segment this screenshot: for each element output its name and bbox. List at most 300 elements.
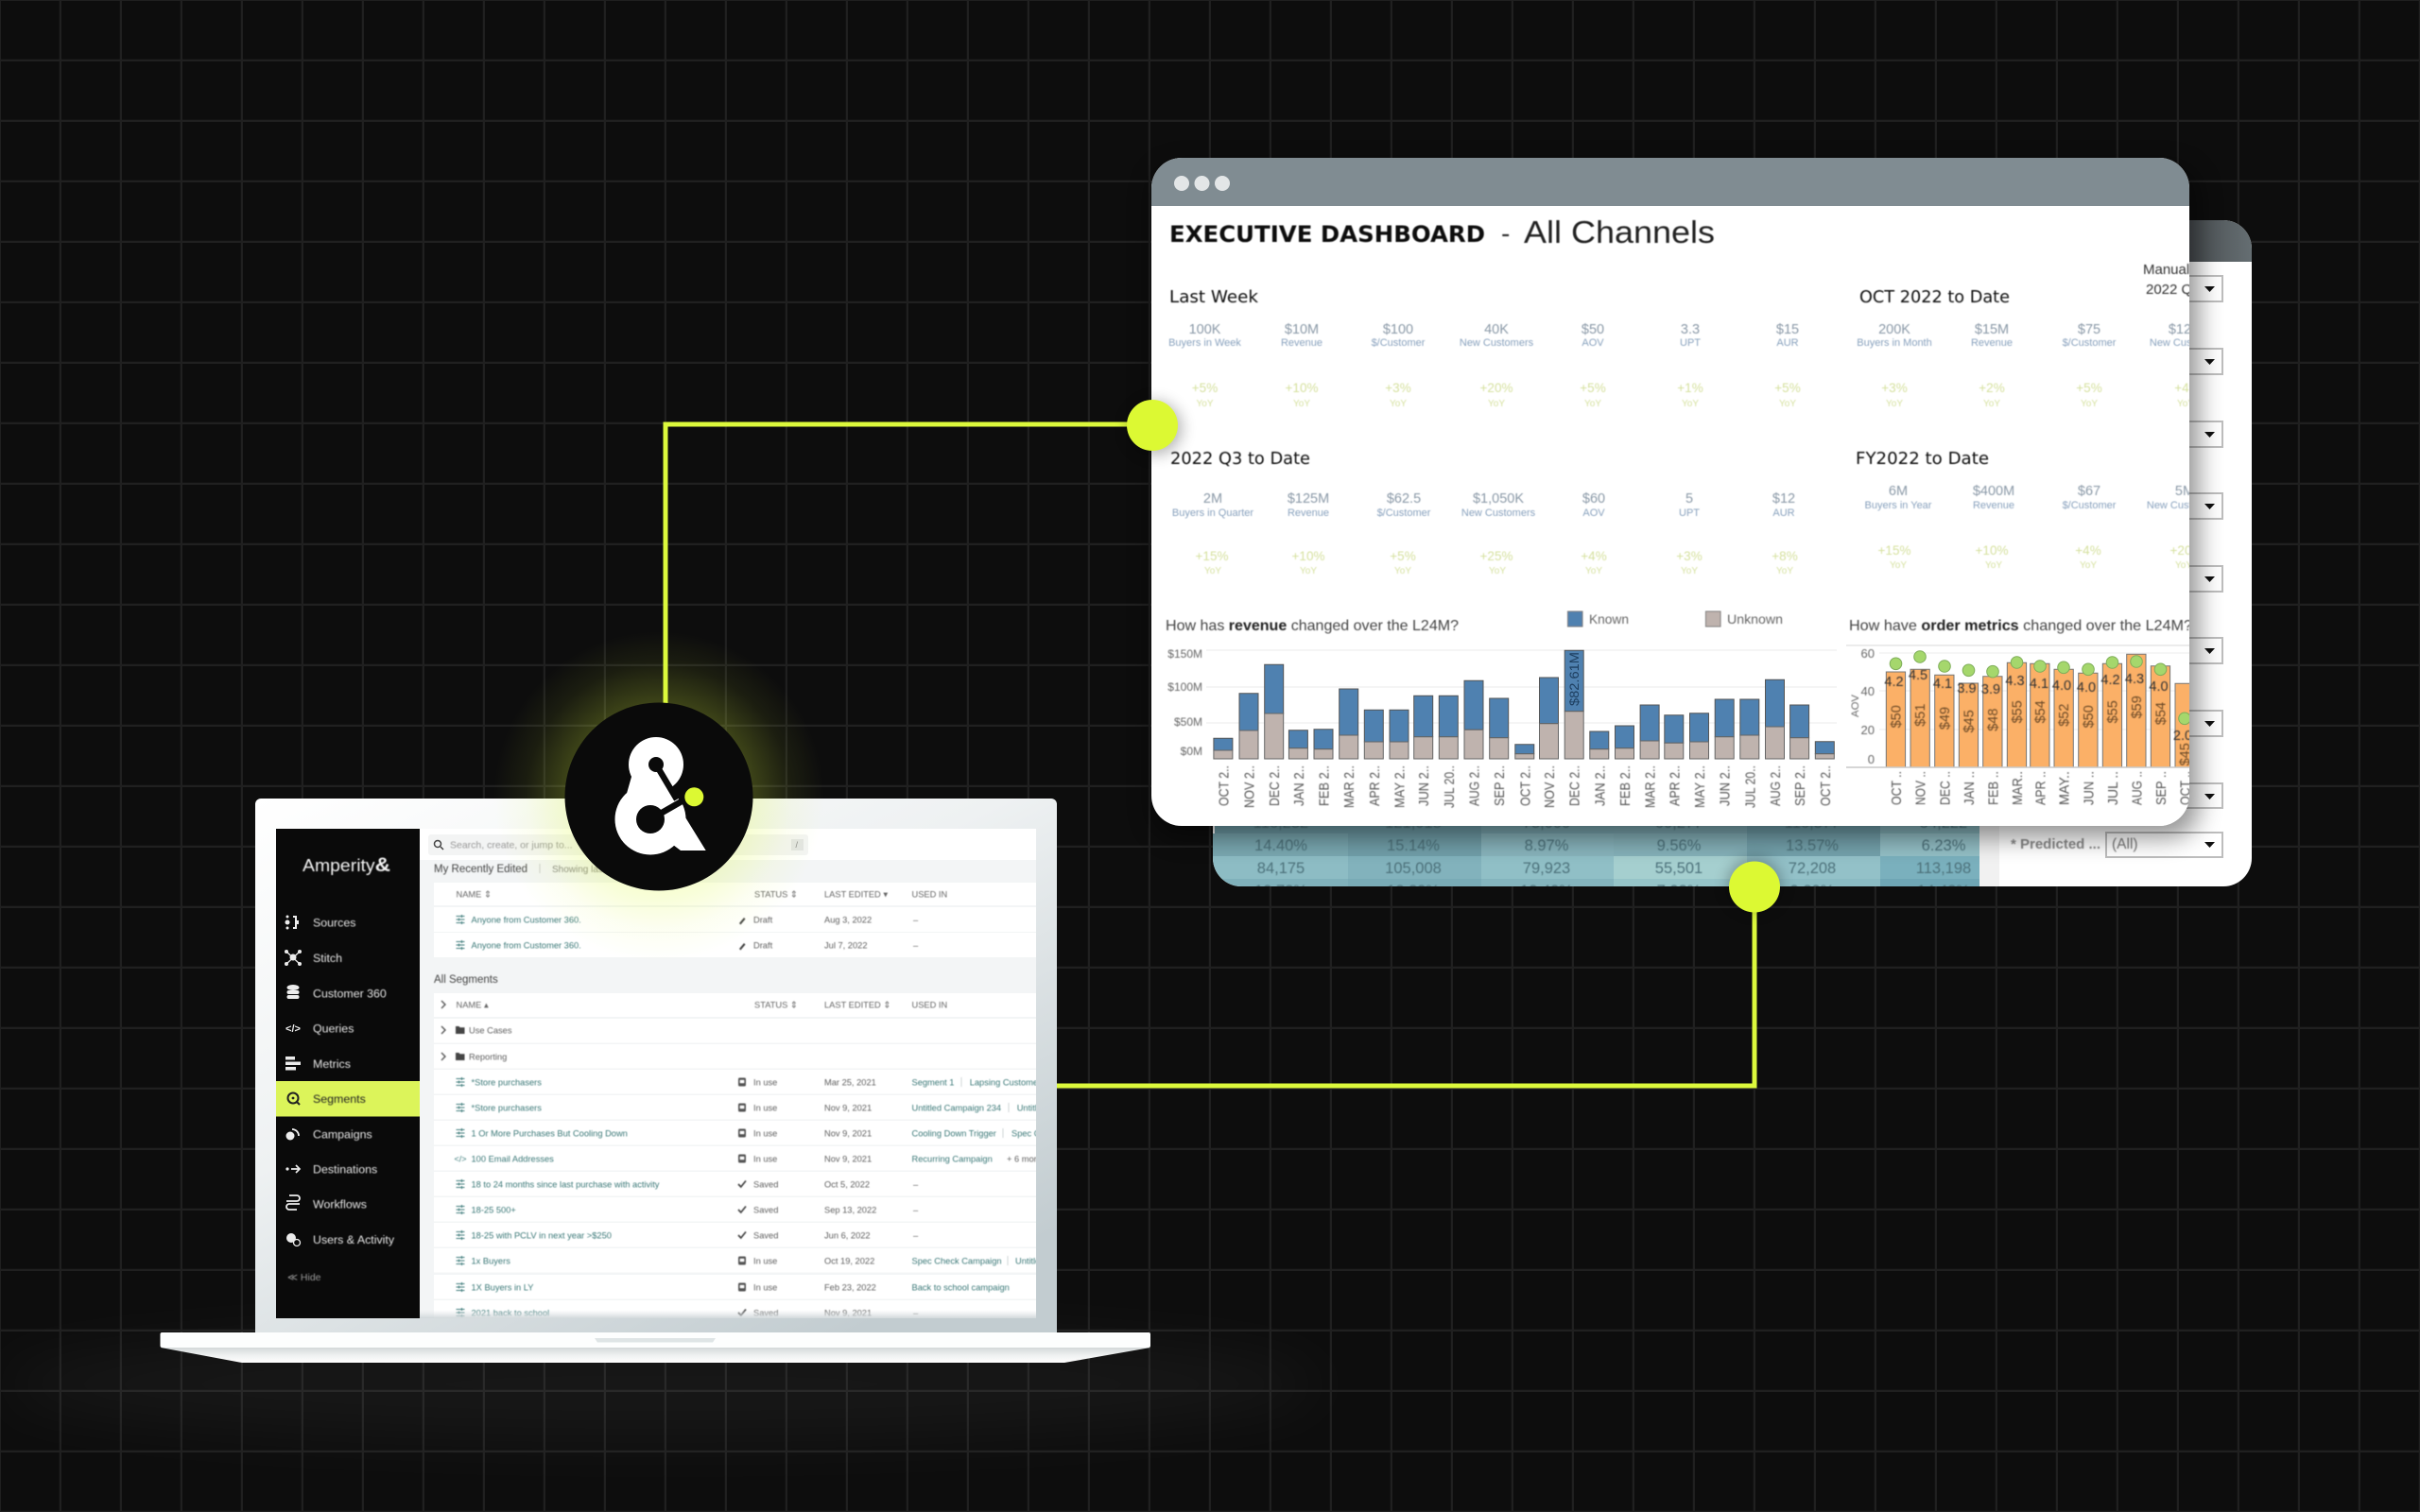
all segments table: Untitled (1015, 1257, 1046, 1266)
KPI block: FY2022 to date: $67 (2078, 484, 2100, 499)
KPI block: last week: YoY (1293, 399, 1310, 409)
AOV axis labels: 20 (1861, 723, 1875, 737)
KPI block: 2022 Q3 to date: UPT (1679, 507, 1700, 519)
heat-map table: 13.57% (1786, 837, 1839, 854)
KPI block: OCT 2022 to date: +2% (1979, 381, 2005, 395)
KPI block: 2022 Q3 to date: New Customers (1461, 507, 1536, 519)
AOV dollar values: $59 (2130, 696, 2145, 718)
revenue month labels: SEP 2.. (1792, 765, 1808, 806)
panel: executive dashboard window (1151, 158, 2224, 826)
recently edited heading (434, 864, 614, 875)
all segments table: Reporting (469, 1053, 507, 1062)
KPI block: last week: YoY (1197, 399, 1214, 409)
revenue month labels: JUL 20.. (1742, 765, 1758, 808)
revenue month labels: NOV 2.. (1542, 765, 1558, 808)
rear side strip (1979, 826, 1999, 886)
KPI block: OCT 2022 to date: YoY (1983, 399, 2000, 409)
all segments table: – (913, 1206, 919, 1215)
revenue month labels: FEB 2.. (1617, 765, 1634, 806)
KPI block: OCT 2022 to date: YoY (2081, 399, 2098, 409)
KPI block: OCT 2022 to date: $/Customer (2063, 337, 2117, 349)
all segments table (434, 993, 1059, 1324)
revenue y axis labels: $100M (1167, 680, 1202, 694)
all segments table: Jun 6, 2022 (824, 1230, 871, 1240)
KPI block: OCT 2022 to date: +4% (2174, 381, 2201, 395)
revenue month labels: FEB 2.. (1316, 765, 1333, 806)
revenue chart (1166, 611, 1837, 808)
all segments table: – (913, 1179, 919, 1189)
search bar (420, 829, 1036, 860)
all segments table: In use (753, 1128, 777, 1138)
all segments table: – (913, 1308, 919, 1317)
KPI block: last week: 3.3 (1681, 322, 1700, 337)
order metrics title: How have order metrics changed over the L24M? (1849, 618, 2192, 634)
all segments table: Cooling Down Trigger (911, 1128, 996, 1138)
KPI block: OCT 2022 to date (1857, 287, 2224, 409)
dashboard title: - (1501, 220, 1510, 249)
order metric month labels (1889, 771, 2193, 805)
all segments table: Nov 9, 2021 (824, 1155, 872, 1164)
nav labels: Destinations (313, 1162, 377, 1176)
revenue month labels: JUL 20.. (1442, 765, 1458, 808)
KPI block: last week: +10% (1286, 381, 1318, 395)
KPI block: 2022 Q3 to date: YoY (1204, 566, 1221, 576)
AOV dollar values (1889, 696, 2193, 765)
KPI block: OCT 2022 to date: $15M (1975, 322, 2009, 337)
KPI block: last week: YoY (1779, 399, 1796, 409)
all segments heading: All Segments (434, 974, 498, 986)
KPI block: 2022 Q3 to date: YoY (1776, 566, 1793, 576)
KPI block: 2022 Q3 to date: Buyers in Quarter (1172, 507, 1253, 519)
KPI block: 2022 Q3 to date: +8% (1772, 549, 1798, 563)
legend: Unknown (1727, 611, 1783, 627)
KPI block: FY2022 to date: New Customers (2147, 500, 2221, 511)
AOV dollar values: $55 (2010, 700, 2025, 723)
all segments table: STATUS ⇕ (754, 1000, 798, 1009)
heat-map table: 9.56% (1657, 837, 1702, 854)
revenue month labels: NOV 2.. (1242, 765, 1257, 808)
UPT values: 3.9 (1957, 681, 1977, 696)
revenue month labels: JUN 2.. (1416, 765, 1432, 806)
heat-map table: 8.97% (1525, 837, 1569, 854)
laptop ground glow (0, 1328, 1323, 1441)
panel: rear dashboard window (1213, 220, 2252, 900)
all segments table: – (913, 1230, 919, 1240)
all segments table: Spec Check (1011, 1128, 1059, 1138)
KPI block: OCT 2022 to date: +5% (2076, 381, 2102, 395)
order metric month labels: NOV .. (1913, 771, 1928, 805)
manual filter note: 2022 Q... (2146, 282, 2204, 298)
nav labels: Segments (313, 1092, 366, 1106)
recently edited table: USED IN (911, 890, 947, 900)
legend (1567, 611, 1783, 627)
laptop (161, 799, 1150, 1363)
heat-map table: 10.72% (1254, 883, 1307, 900)
AOV dollar values: $54 (2033, 700, 2048, 723)
order metric month labels: SEP .. (2153, 771, 2169, 805)
icon: campaigns (285, 1129, 299, 1140)
filter dropdowns (2106, 276, 2222, 857)
KPI block: last week: Last Week (1169, 287, 1259, 307)
all segments table: 1X Buyers in LY (471, 1283, 533, 1293)
order metric month labels: DEC .. (1938, 771, 1953, 805)
nav labels: Metrics (313, 1057, 351, 1071)
order metric month labels: MAY.. (2057, 771, 2072, 805)
KPI block: last week: +5% (1192, 381, 1218, 395)
revenue y axis labels: $150M (1167, 647, 1202, 661)
KPI block: 2022 Q3 to date: +3% (1676, 549, 1703, 563)
UPT values: 4.1 (2030, 677, 2048, 692)
nav labels: Campaigns (313, 1128, 372, 1142)
KPI block: last week: 100K (1189, 322, 1221, 337)
all segments table: In use (753, 1155, 777, 1164)
known revenue bars (1214, 650, 1834, 754)
AOV dollar values: $50 (1889, 705, 1904, 728)
UPT values: 2.0 (2173, 729, 2192, 744)
logo glow (493, 631, 824, 962)
revenue month labels: MAR 2.. (1341, 765, 1357, 808)
revenue month labels: DEC 2.. (1267, 765, 1283, 806)
recently edited table: STATUS ⇕ (754, 890, 798, 900)
nav icons (285, 915, 302, 1246)
all segments table: + 6 more (1007, 1155, 1042, 1164)
heat-map table: 7.02% (1657, 883, 1702, 900)
recently edited table: Jul 7, 2022 (824, 941, 868, 951)
revenue month labels: APR 2.. (1367, 765, 1383, 806)
KPI block: last week: YoY (1390, 399, 1407, 409)
AOV axis labels: 0 (1868, 752, 1875, 766)
icon: stitch (285, 950, 302, 966)
dashboard title (1170, 219, 1715, 244)
KPI block: OCT 2022 to date: OCT 2022 to Date (1859, 287, 2010, 307)
selected nav highlight (276, 1081, 420, 1117)
peak bar value: $82.61M (1566, 652, 1582, 706)
heat-map table: 60,277 (1655, 815, 1703, 832)
KPI block: 2022 Q3 to date (1170, 449, 1798, 576)
all segments table: Segment 1 (911, 1077, 954, 1087)
KPI block: last week (1168, 287, 1801, 409)
recently edited table: Anyone from Customer 360. (471, 941, 581, 951)
KPI block: FY2022 to date: YoY (1890, 560, 1907, 571)
KPI block: FY2022 to date: FY2022 to Date (1856, 449, 1989, 469)
AOV dollar values: $52 (2057, 704, 2072, 727)
dropdown arrows (2204, 286, 2215, 848)
KPI block: FY2022 to date: $400M (1973, 484, 2014, 499)
recently edited table (434, 883, 1036, 957)
heat-map table: 15.14% (1387, 837, 1440, 854)
AOV axis labels: 40 (1861, 684, 1875, 698)
KPI block: 2022 Q3 to date: +4% (1581, 549, 1607, 563)
revenue month labels: JAN 2.. (1291, 765, 1307, 806)
revenue y axis labels: $50M (1174, 715, 1202, 729)
KPI block: FY2022 to date: +4% (2075, 543, 2101, 558)
KPI block: last week: $100 (1383, 322, 1413, 337)
all segments table: Recurring Campaign (911, 1155, 993, 1164)
revenue month labels: SEP 2.. (1492, 765, 1508, 806)
revenue y axis labels: $0M (1181, 745, 1202, 758)
order metric month labels: JAN .. (1962, 771, 1978, 805)
icon: customer 360 database (287, 985, 299, 999)
AOV axis labels: 60 (1861, 646, 1875, 661)
order metric month labels: MAR.. (2010, 771, 2026, 805)
KPI block: last week: +20% (1480, 381, 1512, 395)
KPI block: 2022 Q3 to date: $62.5 (1387, 491, 1421, 507)
UPT values: 4.1 (1933, 677, 1952, 692)
UPT values: 4.5 (1909, 668, 1927, 683)
all segments table: *Store purchasers (471, 1077, 542, 1087)
nav labels: Customer 360 (313, 987, 387, 1000)
all segments table: Oct 19, 2022 (824, 1257, 874, 1266)
connector node: dashboard (1127, 400, 1182, 455)
icon: segments (287, 1092, 300, 1105)
order metric month labels: FEB .. (1985, 771, 2002, 805)
heat-map table: 12.20% (1387, 883, 1440, 900)
KPI block: last week: New Customers (1460, 337, 1534, 349)
KPI block: 2022 Q3 to date: $60 (1582, 491, 1605, 507)
KPI block: 2022 Q3 to date: Revenue (1288, 507, 1329, 519)
revenue month labels: MAY 2.. (1392, 765, 1409, 808)
KPI block: FY2022 to date: YoY (2080, 560, 2097, 571)
heat-map table (1213, 826, 1979, 886)
manual filter note (2143, 263, 2189, 297)
UPT values: 4.2 (1884, 675, 1904, 690)
KPI block: FY2022 to date (1856, 449, 2221, 571)
order metric month labels: AUG .. (2129, 771, 2146, 805)
all segments table: 1 Or More Purchases But Cooling Down (471, 1128, 628, 1138)
connector node: rear panel (1728, 858, 1781, 913)
KPI block: last week: +5% (1580, 381, 1606, 395)
all segments table: 100 Email Addresses (471, 1155, 554, 1164)
KPI block: OCT 2022 to date: YoY (1886, 399, 1903, 409)
predicted filter label: * Predicted ... (2011, 836, 2100, 852)
all segments table: 1x Buyers (471, 1257, 510, 1266)
KPI block: last week: $10M (1285, 322, 1319, 337)
KPI block: FY2022 to date: $/Customer (2063, 500, 2117, 511)
revenue month labels: OCT 2.. (1517, 765, 1533, 806)
revenue month labels: JAN 2.. (1592, 765, 1608, 806)
all segments table: Spec Check Campaign (911, 1257, 1002, 1266)
heat-map table: 54,222 (1920, 815, 1967, 832)
all segments table: Untitled (1017, 1104, 1046, 1113)
all segments table: Mar 25, 2021 (824, 1077, 876, 1087)
heat-map table: 6.23% (1922, 837, 1966, 854)
UPT values: 3.9 (1981, 682, 2000, 697)
KPI block: last week: $/Customer (1372, 337, 1426, 349)
card shadow (1151, 165, 2199, 838)
all segments table: Nov 9, 2021 (824, 1128, 872, 1138)
heat-map table: 84,175 (1257, 860, 1305, 877)
window title bar (1151, 158, 2189, 206)
KPI block: 2022 Q3 to date: 5 (1685, 491, 1693, 507)
KPI block: OCT 2022 to date: Revenue (1971, 337, 2013, 349)
icon: workflows (286, 1195, 300, 1210)
AOV axis labels (1850, 646, 1875, 766)
KPI block: last week: +5% (1774, 381, 1801, 395)
icon: users gear (286, 1233, 301, 1246)
rear window title bar (2189, 220, 2252, 262)
KPI block: 2022 Q3 to date: +15% (1196, 549, 1228, 563)
all segments table: In use (753, 1077, 777, 1087)
revenue month labels: APR 2.. (1667, 765, 1683, 806)
all segments table: Saved (753, 1308, 778, 1317)
heat-map table: 55,501 (1655, 860, 1703, 877)
KPI block: FY2022 to date: Buyers in Year (1865, 500, 1932, 511)
heat-map table: 9.20% (1790, 883, 1835, 900)
recently edited table: Draft (753, 941, 773, 951)
revenue y axis labels (1167, 647, 1202, 758)
KPI block: 2022 Q3 to date: $12 (1772, 491, 1795, 507)
revenue month labels: JUN 2.. (1718, 765, 1734, 806)
heat-map table: 14.42% (1917, 883, 1970, 900)
revenue month labels: AUG 2.. (1768, 765, 1784, 806)
heat-map table: 79,923 (1523, 860, 1570, 877)
icon: sources (285, 915, 299, 930)
all segments table: 18-25 with PCLV in next year >$250 (471, 1230, 612, 1240)
KPI block: last week: $15 (1776, 322, 1799, 337)
KPI block: 2022 Q3 to date: AUR (1772, 507, 1795, 519)
all segments table: 18 to 24 months since last purchase with activity (471, 1179, 660, 1189)
KPI block: FY2022 to date: 6M (1889, 484, 1908, 499)
recently edited table: – (913, 915, 919, 924)
all segments table: NAME ▴ (456, 1000, 489, 1009)
KPI block: FY2022 to date: YoY (1985, 560, 2002, 571)
all segments table: 18-25 500+ (471, 1206, 516, 1215)
KPI block: FY2022 to date: YoY (2175, 560, 2192, 571)
KPI block: last week: YoY (1682, 399, 1699, 409)
dashboard title: EXECUTIVE DASHBOARD (1169, 221, 1485, 248)
KPI block: 2022 Q3 to date: YoY (1394, 566, 1411, 576)
order metric month labels: JUL .. (2105, 771, 2121, 805)
search bar: Search, create, or jump to... (450, 839, 573, 850)
nav labels: Workflows (313, 1198, 367, 1211)
all segments table: Lapsing Customers (970, 1077, 1046, 1087)
nav labels: Users & Activity (313, 1233, 395, 1246)
all segments table: In use (753, 1283, 777, 1293)
KPI block: last week: +1% (1677, 381, 1703, 395)
KPI block: OCT 2022 to date: New Customers (2150, 337, 2224, 349)
KPI block: 2022 Q3 to date: +25% (1480, 549, 1512, 563)
all segments table: Nov 9, 2021 (824, 1104, 872, 1113)
brand wordmark: Amperity & (302, 854, 390, 876)
icon: ampersand mark (614, 737, 706, 854)
KPI block: last week: Revenue (1281, 337, 1322, 349)
logo badge (565, 703, 752, 890)
KPI block: 2022 Q3 to date: YoY (1585, 566, 1602, 576)
laptop app sidebar (276, 829, 420, 1318)
KPI block: last week: 40K (1484, 322, 1509, 337)
order metric month labels: OCT .. (2178, 771, 2193, 805)
KPI block: 2022 Q3 to date: $1,050K (1473, 491, 1524, 507)
recently edited heading: Showing last 5 (552, 865, 614, 875)
connector: lower line from laptop to rear panel (1049, 886, 1754, 1086)
nav labels: Stitch (313, 952, 342, 965)
KPI block: last week: Buyers in Week (1168, 337, 1241, 349)
heat-map table: 116,232 (1253, 815, 1308, 832)
heat-map table: 72,208 (1789, 860, 1836, 877)
nav labels: Queries (313, 1022, 354, 1036)
UPT values (1884, 668, 2192, 744)
AOV dollar values: $50 (2082, 705, 2097, 728)
UPT values: 4.0 (2052, 679, 2071, 694)
all segments table: Oct 5, 2022 (824, 1179, 870, 1189)
order metrics chart (1843, 614, 2194, 826)
nav labels (287, 917, 395, 1283)
KPI block: 2022 Q3 to date: $/Customer (1377, 507, 1431, 519)
search bar: / (796, 840, 798, 850)
legend: Known (1589, 611, 1629, 627)
heat-map table: 116,377 (1785, 815, 1840, 832)
nav labels: Sources (313, 917, 355, 930)
all segments table: </> (454, 1155, 467, 1164)
nav labels: ≪ Hide (287, 1272, 321, 1283)
UPT values: 4.3 (2005, 674, 2025, 689)
AOV dollar values: $54 (2153, 702, 2169, 725)
KPI block: last week: YoY (1488, 399, 1505, 409)
all segments table: 2021 back to school (471, 1308, 549, 1317)
KPI block: 2022 Q3 to date: $125M (1288, 491, 1329, 507)
AOV dollar values: $48 (1986, 709, 2001, 731)
revenue month labels: OCT 2.. (1216, 765, 1232, 806)
icon: metrics (285, 1057, 301, 1070)
all segments table: Sep 13, 2022 (824, 1206, 876, 1215)
order metric month labels: JUN .. (2082, 771, 2097, 805)
KPI block: OCT 2022 to date: +3% (1881, 381, 1908, 395)
all segments table: Saved (753, 1179, 778, 1189)
KPI block: FY2022 to date: 5M (2175, 484, 2194, 499)
KPI block: last week: AUR (1776, 337, 1799, 349)
revenue month labels: DEC 2.. (1567, 765, 1583, 806)
KPI block: 2022 Q3 to date: AOV (1582, 507, 1605, 519)
KPI block: 2022 Q3 to date: +10% (1292, 549, 1324, 563)
KPI block: FY2022 to date: +20% (2170, 543, 2203, 558)
order metric month labels: OCT .. (1889, 771, 1905, 805)
KPI block: 2022 Q3 to date: YoY (1300, 566, 1317, 576)
KPI block: last week: AOV (1582, 337, 1604, 349)
KPI block: FY2022 to date: Revenue (1973, 500, 2014, 511)
all segments table: Back to school campaign (911, 1283, 1010, 1293)
heat-map table: 14.40% (1254, 837, 1307, 854)
recently edited heading: My Recently Edited (434, 864, 527, 875)
KPI block: OCT 2022 to date: 200K (1878, 322, 1910, 337)
AOV dollar values: $49 (1938, 707, 1953, 730)
all segments table: Nov 9, 2021 (824, 1308, 872, 1317)
recently edited table: LAST EDITED ▾ (824, 890, 888, 900)
recently edited table: NAME ⇕ (456, 890, 492, 900)
heat-map table: 105,008 (1385, 860, 1442, 877)
all segments table: Saved (753, 1230, 778, 1240)
unknown revenue bars (1214, 712, 1834, 759)
UPT dots (1890, 651, 2190, 725)
KPI block: OCT 2022 to date: $75 (2078, 322, 2100, 337)
heat-map table: 73,000 (1523, 815, 1570, 832)
predicted filter label: (All) (2112, 836, 2138, 852)
KPI block: FY2022 to date: +15% (1878, 543, 1910, 558)
laptop app content (420, 829, 1059, 1324)
KPI block: OCT 2022 to date: $12M (2169, 322, 2203, 337)
KPI block: 2022 Q3 to date: 2M (1203, 491, 1222, 507)
revenue month labels: OCT 2.. (1818, 765, 1834, 806)
laptop screen bezel (255, 799, 1057, 1332)
recently edited table: – (913, 941, 919, 951)
KPI block: 2022 Q3 to date: +5% (1390, 549, 1416, 563)
all segments table: Saved (753, 1206, 778, 1215)
KPI block: last week: YoY (1584, 399, 1601, 409)
UPT values: 4.2 (2100, 673, 2120, 688)
orange AOV bars (1886, 654, 2194, 767)
icon: destinations (285, 1165, 300, 1173)
KPI block: OCT 2022 to date: YoY (2177, 399, 2194, 409)
KPI block: last week: $50 (1582, 322, 1604, 337)
